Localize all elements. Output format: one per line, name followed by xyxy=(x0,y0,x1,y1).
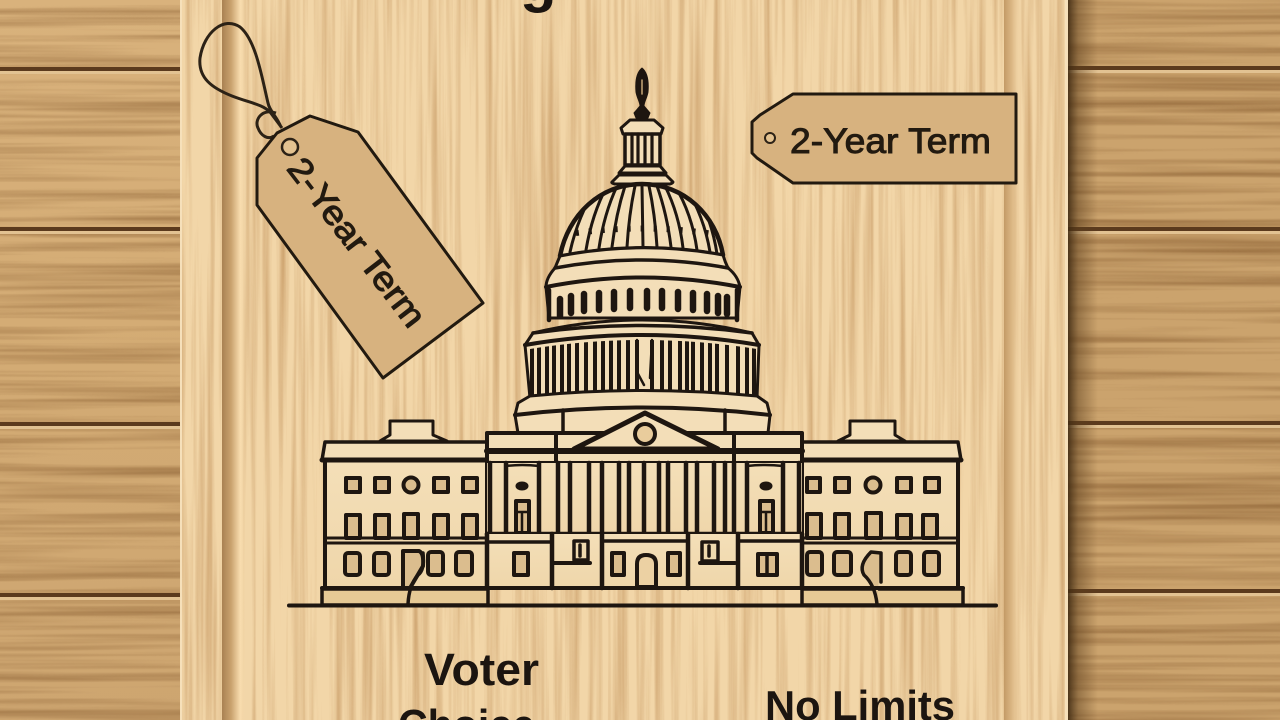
dome colonnade xyxy=(525,320,759,400)
tag hole xyxy=(765,133,775,143)
dome drum with windows xyxy=(546,248,740,320)
tag body xyxy=(257,116,483,378)
tag: left hanging 2-Year Term xyxy=(200,23,483,378)
icon: capitol building xyxy=(289,68,996,606)
left wing crack xyxy=(408,553,423,604)
tag label: 2-Year Term xyxy=(790,122,991,161)
portico door xyxy=(637,555,656,587)
tag body xyxy=(752,94,1016,183)
right wing windows xyxy=(807,478,939,575)
portico stair windows xyxy=(552,541,735,563)
right wing body xyxy=(802,460,958,588)
capitol central portico xyxy=(322,413,963,588)
tag: right horizontal 2-Year Term xyxy=(752,94,1016,183)
portico side bay windows xyxy=(516,482,773,533)
capitol right wing xyxy=(802,421,963,605)
dome statue xyxy=(634,68,650,118)
portico entablature xyxy=(487,433,802,463)
tag hole xyxy=(282,139,298,155)
tag string xyxy=(200,23,282,138)
right wing crack xyxy=(862,552,881,604)
left wing base xyxy=(322,589,488,605)
tag label: 2-Year Term xyxy=(279,151,433,335)
left wing windows xyxy=(345,478,477,588)
dome lantern xyxy=(612,120,673,184)
dome cupola with ribs xyxy=(560,184,723,256)
label: Voter Choice: Voter xyxy=(424,644,539,695)
capitol left wing xyxy=(322,421,488,605)
label: Voter Choice xyxy=(398,644,539,720)
dome base xyxy=(515,390,770,433)
right roof pad xyxy=(838,421,905,441)
portico pediment xyxy=(574,413,718,449)
left wing body xyxy=(325,460,487,588)
right wing base xyxy=(802,589,963,605)
left roof pad xyxy=(380,421,447,441)
portico lower windows xyxy=(514,553,777,575)
ground line xyxy=(289,604,996,608)
capitol dome xyxy=(515,68,770,433)
portico lower storey xyxy=(322,534,963,588)
wooden board panel xyxy=(180,0,1068,720)
portico columns xyxy=(487,463,802,534)
